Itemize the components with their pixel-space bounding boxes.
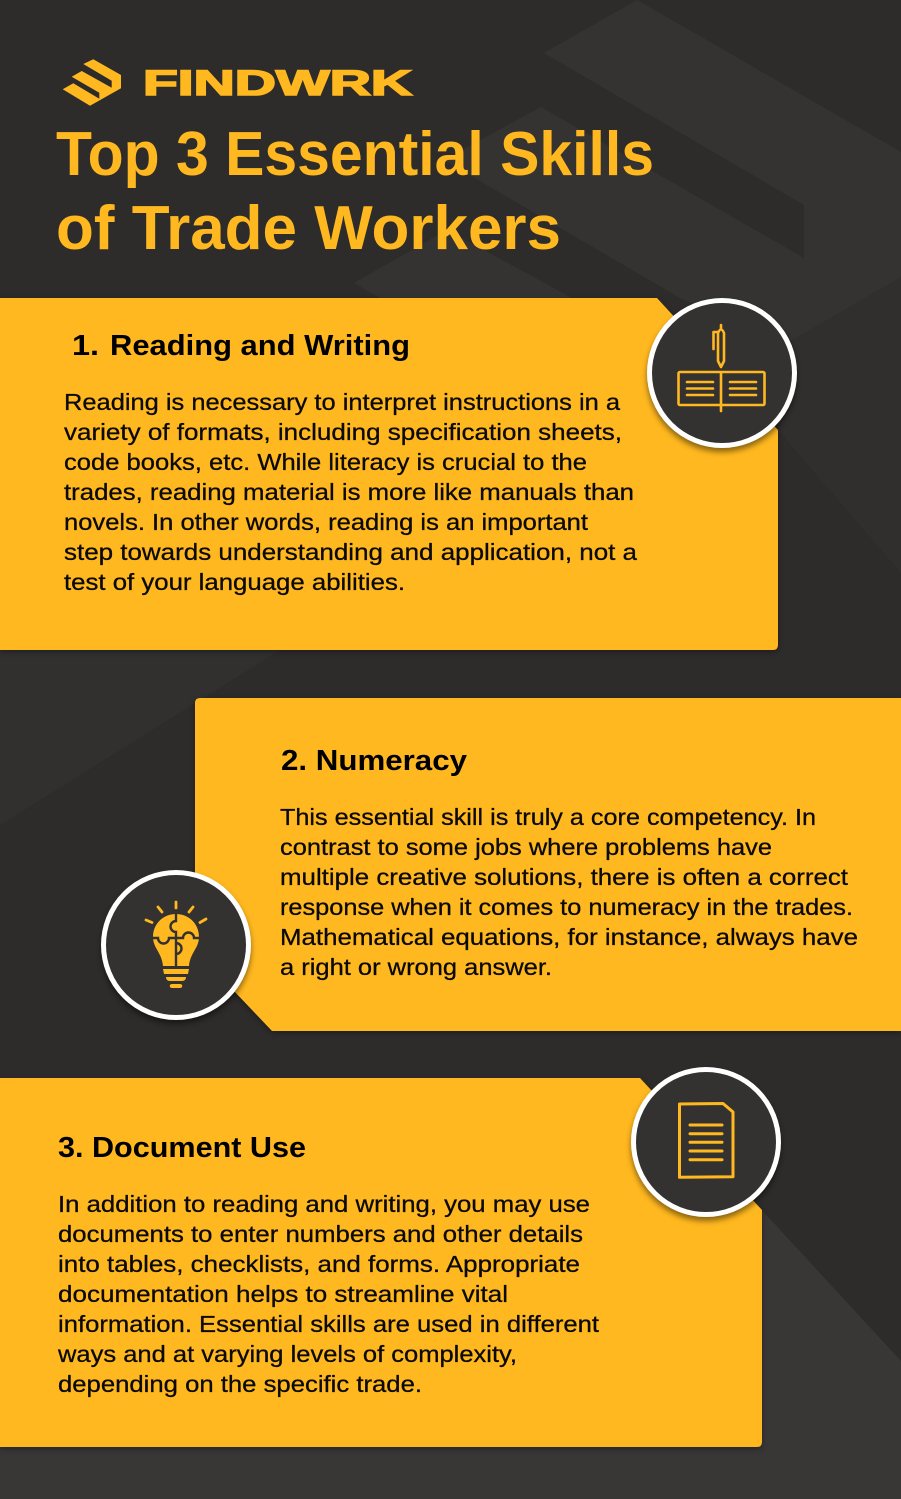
- body text: Reading is necessary to interpret instructions in a: [64, 389, 621, 415]
- body text: This essential skill is truly a core competency. In: [280, 804, 816, 830]
- body text: into tables, checklists, and forms. Appropriate: [58, 1251, 580, 1277]
- heading: 1.: [72, 330, 99, 362]
- body text: depending on the specific trade.: [58, 1371, 422, 1397]
- panel background: [195, 698, 901, 1031]
- body text: [64, 389, 638, 595]
- body text: novels. In other words, reading is an important: [64, 509, 588, 535]
- title: Top 3 Essential Skills: [56, 120, 654, 189]
- body text: [280, 804, 858, 980]
- body text: ways and at varying levels of complexity,: [57, 1341, 517, 1367]
- panel: document use: [0, 1070, 778, 1447]
- body text: multiple creative solutions, there is often a correct: [280, 864, 849, 890]
- heading: Reading and Writing: [110, 330, 410, 362]
- icon: pen and open book: [650, 300, 794, 446]
- title: [56, 120, 654, 263]
- panel: numeracy: [104, 698, 901, 1031]
- panel background: [0, 1078, 762, 1447]
- body text: [57, 1191, 600, 1397]
- logo wordmark: FINDWRK: [143, 64, 412, 103]
- body text: In addition to reading and writing, you may use: [58, 1191, 590, 1217]
- body text: information. Essential skills are used in different: [58, 1311, 600, 1337]
- body text: trades, reading material is more like manuals than: [64, 479, 634, 505]
- body text: documentation helps to streamline vital: [58, 1281, 508, 1307]
- icon: findwrk mark: [63, 59, 121, 106]
- body text: test of your language abilities.: [64, 569, 405, 595]
- panel: reading and writing: [0, 298, 794, 650]
- title: of Trade Workers: [56, 194, 561, 263]
- icon: puzzle light bulb: [104, 872, 248, 1018]
- body text: Mathematical equations, for instance, always have: [280, 924, 858, 950]
- icon: document: [634, 1070, 778, 1214]
- body text: contrast to some jobs where problems have: [280, 834, 772, 860]
- panel background: [0, 298, 778, 650]
- heading: 2. Numeracy: [281, 745, 467, 777]
- heading: 3. Document Use: [58, 1132, 306, 1164]
- body text: variety of formats, including specification sheets,: [64, 419, 622, 445]
- body text: a right or wrong answer.: [280, 954, 552, 980]
- body text: documents to enter numbers and other details: [58, 1221, 583, 1247]
- body text: code books, etc. While literacy is crucial to the: [64, 449, 587, 475]
- logo: [63, 59, 412, 106]
- body text: step towards understanding and application, not a: [64, 539, 638, 565]
- body text: response when it comes to numeracy in the trades.: [280, 894, 853, 920]
